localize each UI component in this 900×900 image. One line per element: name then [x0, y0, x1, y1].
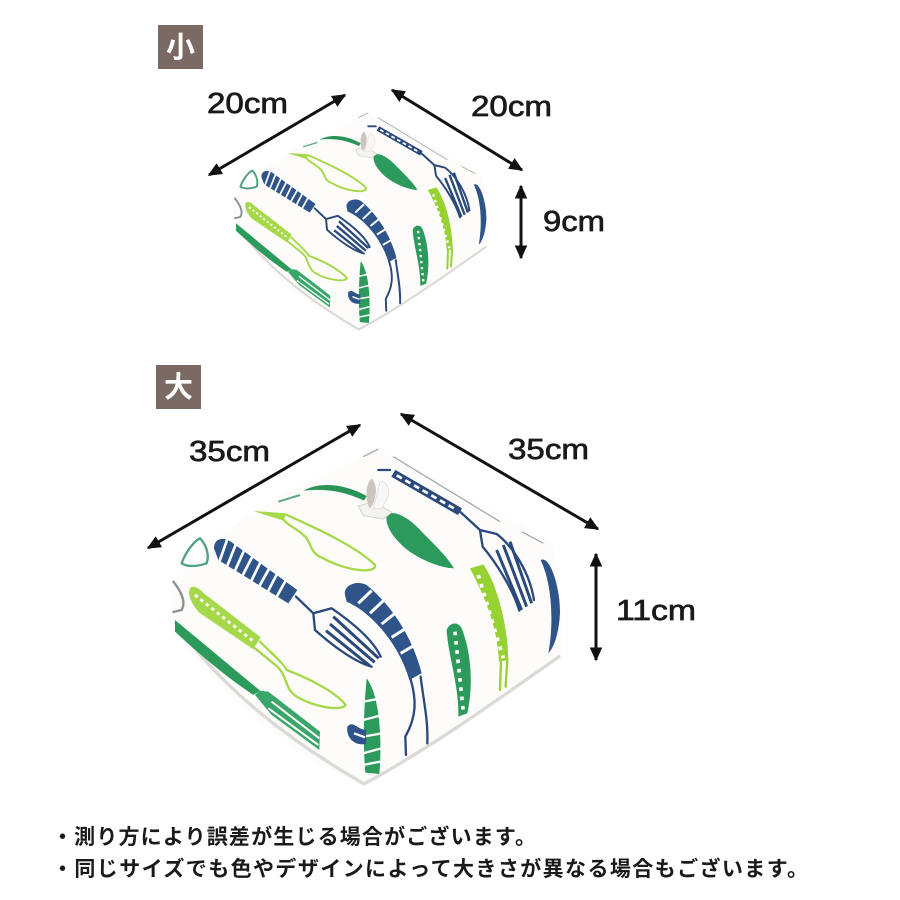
- small size: depth dimension: 20cm: [471, 91, 552, 123]
- note: measurement error: ・測り方により誤差が生じる場合がございます。: [52, 825, 536, 849]
- badge: small: [158, 25, 203, 69]
- green dotted handle: [447, 624, 471, 717]
- green striped handle, bottom corner: [363, 678, 382, 774]
- large food cover illustration: [172, 449, 562, 786]
- top green knife: [278, 485, 367, 502]
- badge: large: 大: [164, 371, 193, 404]
- large size: height dimension: [596, 554, 696, 660]
- navy fork, upper right: [378, 470, 534, 611]
- green leaf blade: [386, 513, 454, 568]
- small size: height dimension: 9cm: [543, 206, 605, 238]
- small food cover illustration: [234, 113, 488, 331]
- large size: depth dimension: [401, 414, 598, 529]
- navy right-edge bar: [541, 560, 560, 653]
- large size: width dimension: 35cm: [189, 436, 270, 468]
- small size: width dimension: [207, 88, 345, 175]
- large size: depth dimension: 35cm: [508, 434, 589, 466]
- badge: large: [156, 365, 201, 409]
- lime dotted knife, left: [189, 587, 346, 708]
- grey outline fragment: [173, 582, 183, 612]
- large size: height dimension: 11cm: [616, 595, 696, 627]
- small size: height dimension: [521, 186, 605, 258]
- lime knife outline, top: [253, 511, 375, 570]
- navy striped handle, front right: [345, 583, 427, 755]
- note: size varies by colour and design: ・同じサイズでも色やデザインによって大きさが異なる場合もございます。: [52, 857, 808, 881]
- badge: small: 小: [166, 31, 195, 64]
- navy fragment, bottom corner: [347, 724, 366, 744]
- small size: depth dimension: [392, 90, 552, 170]
- large size: width dimension: [148, 425, 360, 548]
- handle tab: [358, 478, 392, 519]
- teal outline shape: [182, 538, 208, 566]
- green fork, bottom left: [175, 620, 320, 750]
- navy fork, front left: [214, 538, 381, 667]
- lime dotted handle: [470, 564, 508, 690]
- small size: width dimension: 20cm: [207, 88, 288, 120]
